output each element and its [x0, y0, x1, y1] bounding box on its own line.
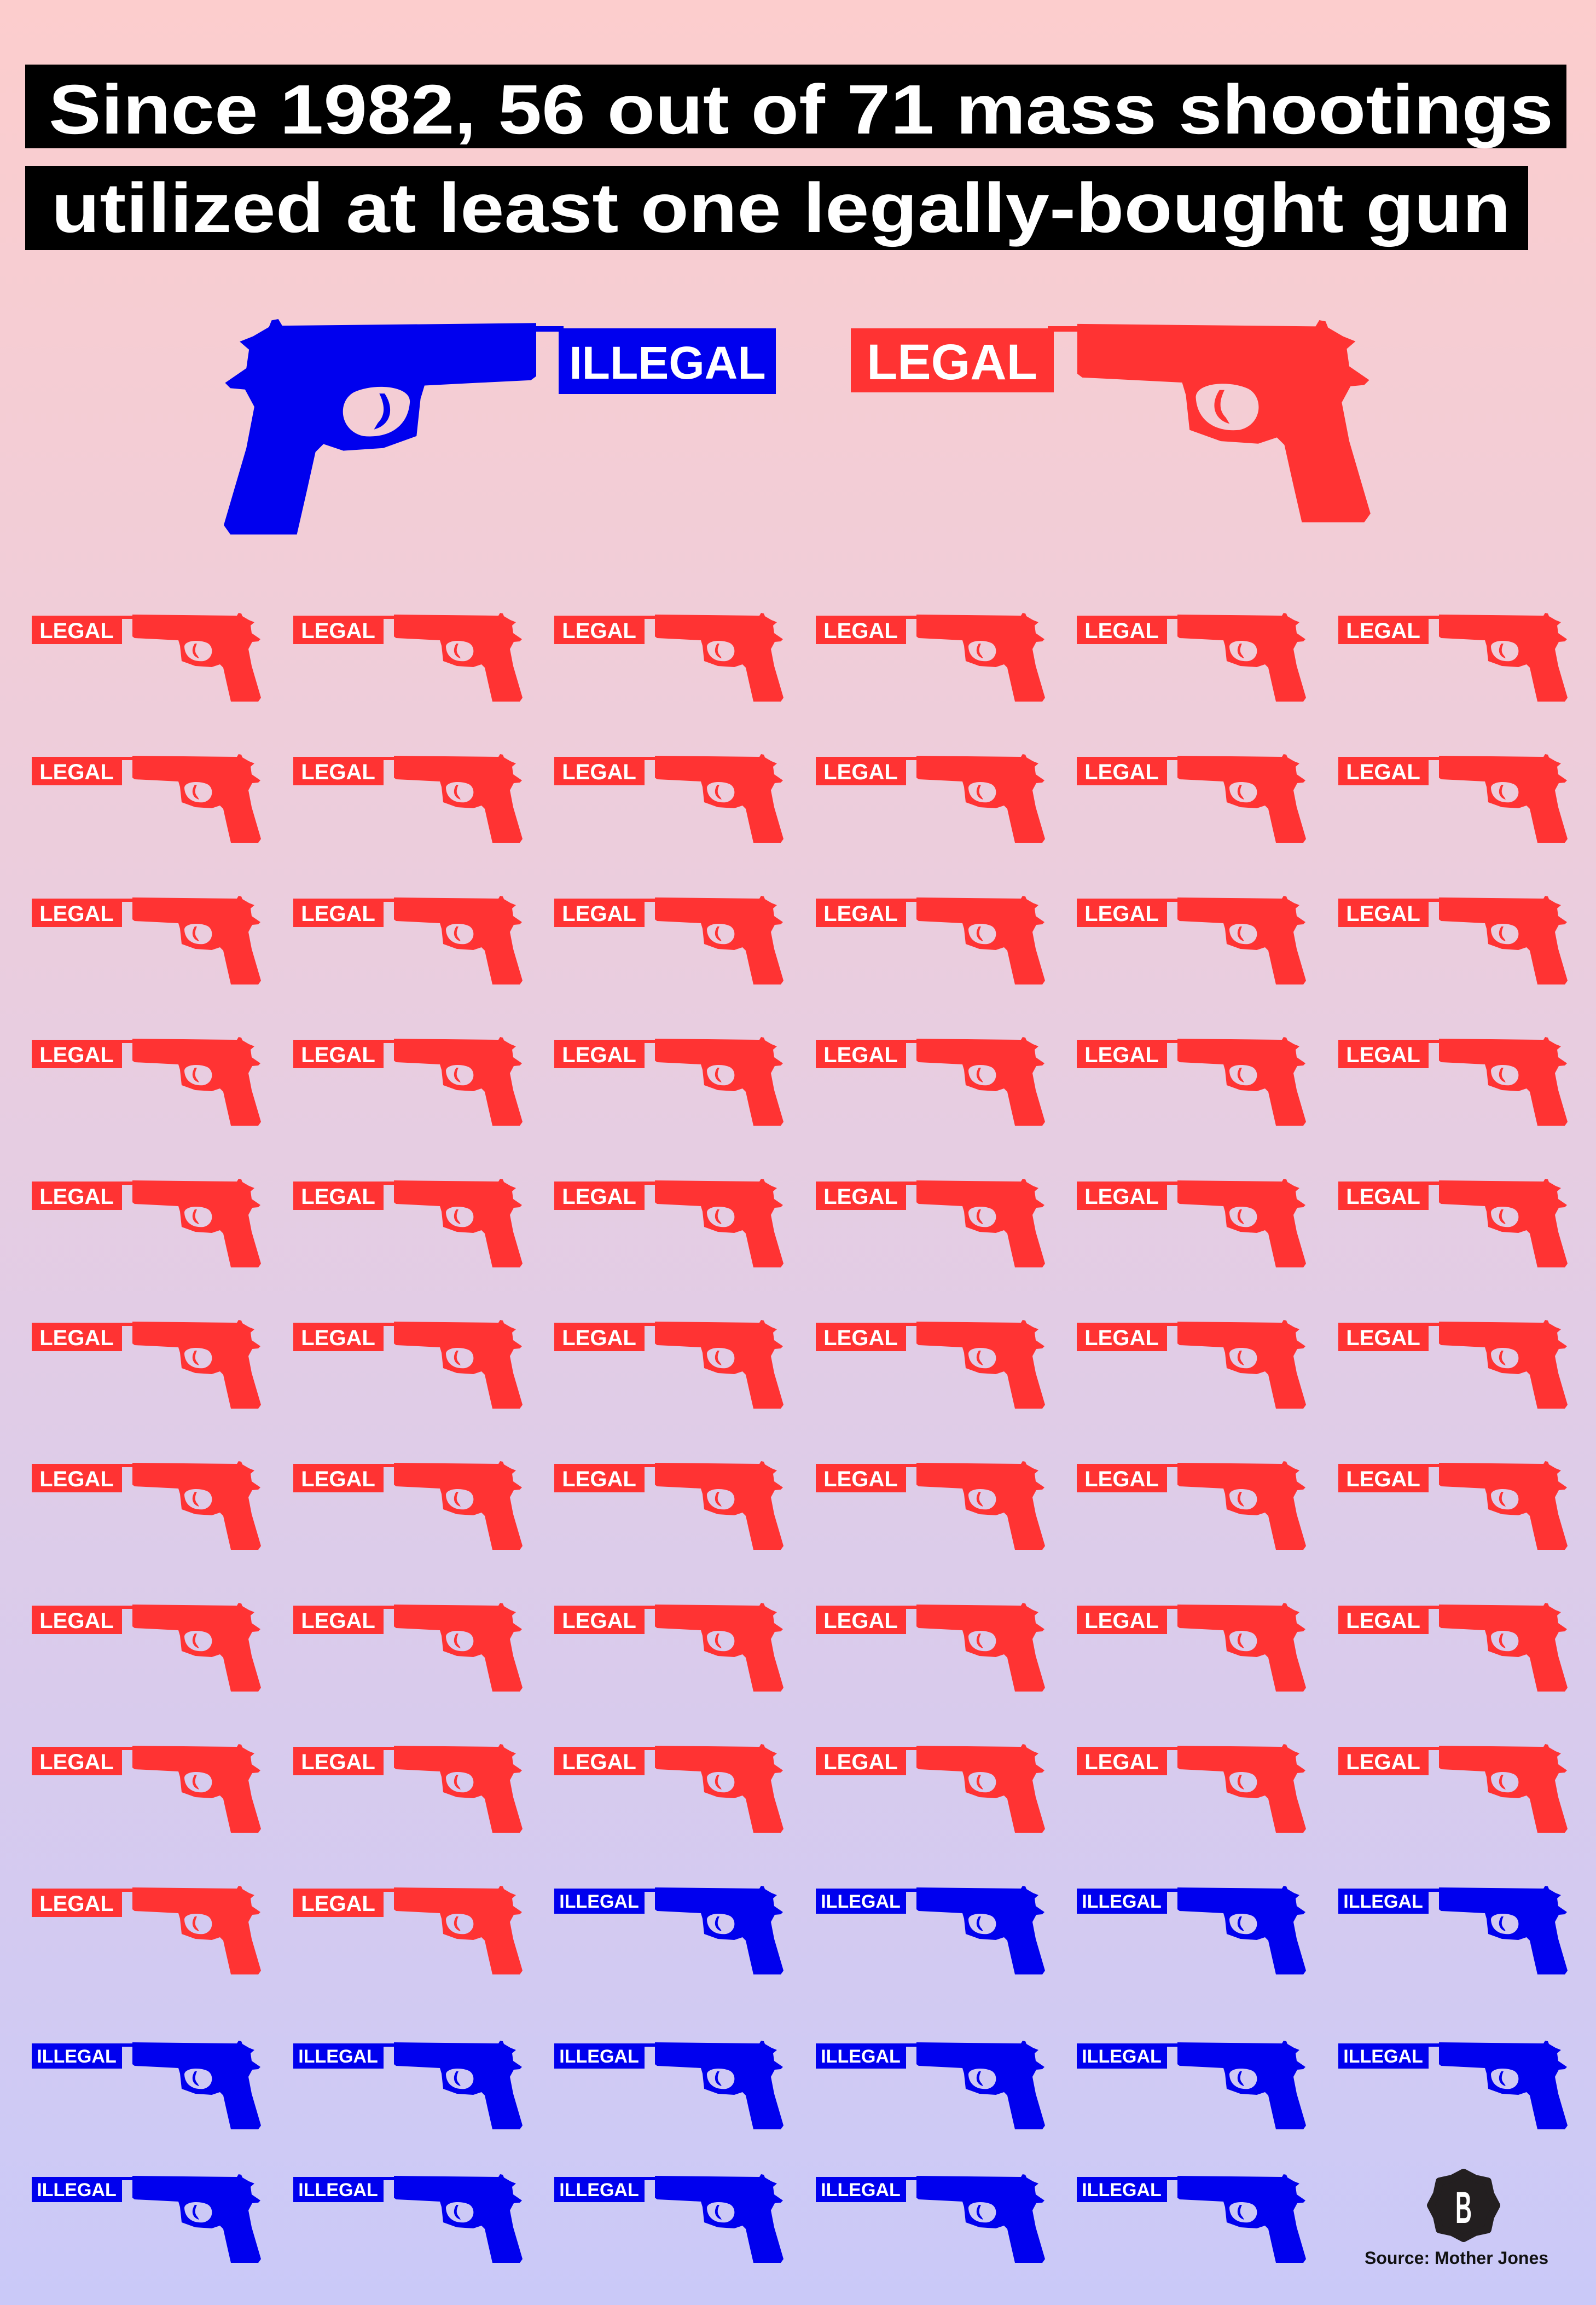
legend: illegal big gun — [224, 319, 776, 535]
row 3 legal: LEGAL — [823, 902, 898, 926]
row 11 illegal: ILLEGAL — [37, 2046, 117, 2067]
logo badge: B — [1455, 2183, 1472, 2233]
row 11 illegal: ILLEGAL — [298, 2046, 378, 2067]
legend: legal big gun — [851, 320, 1371, 522]
row 2 legal: LEGAL — [823, 760, 898, 784]
row 7 legal: LEGAL — [823, 1467, 898, 1491]
row 7 legal: LEGAL — [562, 1467, 636, 1491]
row 11 illegal: ILLEGAL — [559, 2046, 639, 2067]
row 10 mixed: ILLEGAL — [821, 1891, 901, 1912]
row 10 mixed: LEGAL — [39, 1892, 114, 1916]
row 9 legal: LEGAL — [39, 1750, 114, 1774]
row 6 legal: LEGAL — [1346, 1326, 1420, 1350]
row 1 legal — [32, 613, 1568, 702]
title — [25, 65, 1566, 250]
row 9 legal: LEGAL — [1346, 1750, 1420, 1774]
row 5 legal: LEGAL — [1346, 1185, 1420, 1209]
row 4 legal: LEGAL — [1346, 1043, 1420, 1067]
row 6 legal: LEGAL — [1084, 1326, 1159, 1350]
row 12 illegal: ILLEGAL — [1082, 2180, 1162, 2200]
row 2 legal: LEGAL — [301, 760, 375, 784]
row 1 legal: LEGAL — [1084, 619, 1159, 643]
row 5 legal: LEGAL — [301, 1185, 375, 1209]
row 11 illegal: ILLEGAL — [1082, 2046, 1162, 2067]
row 3 legal: LEGAL — [1346, 902, 1420, 926]
row 6 legal: LEGAL — [301, 1326, 375, 1350]
row 4 legal: LEGAL — [301, 1043, 375, 1067]
row 7 legal: LEGAL — [1084, 1467, 1159, 1491]
row 11 illegal — [32, 2041, 1568, 2129]
row 6 legal: LEGAL — [562, 1326, 636, 1350]
legend: legal big gun: LEGAL — [867, 334, 1037, 390]
row 1 legal: LEGAL — [562, 619, 636, 643]
row 12 illegal: ILLEGAL — [298, 2180, 378, 2200]
row 5 legal: LEGAL — [39, 1185, 114, 1209]
source: Source: Mother Jones — [1365, 2248, 1548, 2268]
row 2 legal: LEGAL — [1346, 760, 1420, 784]
gun grid: 56 legal, 15 illegal — [32, 613, 1568, 2263]
row 10 mixed: ILLEGAL — [1082, 1891, 1162, 1912]
row 10 mixed: ILLEGAL — [559, 1891, 639, 1912]
row 6 legal: LEGAL — [39, 1326, 114, 1350]
row 8 legal: LEGAL — [39, 1609, 114, 1633]
row 9 legal: LEGAL — [823, 1750, 898, 1774]
title: Since 1982, 56 out of 71 mass shootings — [49, 71, 1553, 149]
row 7 legal: LEGAL — [39, 1467, 114, 1491]
row 7 legal: LEGAL — [301, 1467, 375, 1491]
row 7 legal: LEGAL — [1346, 1467, 1420, 1491]
row 9 legal: LEGAL — [1084, 1750, 1159, 1774]
row 2 legal — [32, 754, 1568, 843]
row 7 legal — [32, 1461, 1568, 1550]
row 9 legal: LEGAL — [562, 1750, 636, 1774]
row 4 legal: LEGAL — [823, 1043, 898, 1067]
row 8 legal — [32, 1603, 1568, 1692]
logo badge — [1431, 2173, 1496, 2238]
row 4 legal: LEGAL — [562, 1043, 636, 1067]
row 12 illegal: ILLEGAL — [559, 2180, 639, 2200]
row 12 illegal: ILLEGAL — [37, 2180, 117, 2200]
row 8 legal: LEGAL — [301, 1609, 375, 1633]
row 2 legal: LEGAL — [39, 760, 114, 784]
row 3 legal: LEGAL — [39, 902, 114, 926]
row 9 legal — [32, 1744, 1568, 1833]
row 10 mixed: LEGAL — [301, 1892, 375, 1916]
row 4 legal: LEGAL — [39, 1043, 114, 1067]
row 1 legal: LEGAL — [823, 619, 898, 643]
row 11 illegal: ILLEGAL — [1343, 2046, 1423, 2067]
row 2 legal: LEGAL — [562, 760, 636, 784]
row 6 legal — [32, 1320, 1568, 1409]
row 4 legal: LEGAL — [1084, 1043, 1159, 1067]
row 10 mixed: ILLEGAL — [1343, 1891, 1423, 1912]
row 6 legal: LEGAL — [823, 1326, 898, 1350]
row 3 legal — [32, 896, 1568, 984]
legend: illegal big gun: ILLEGAL — [569, 337, 766, 389]
row 3 legal: LEGAL — [1084, 902, 1159, 926]
row 4 legal — [32, 1037, 1568, 1126]
row 9 legal: LEGAL — [301, 1750, 375, 1774]
row 8 legal: LEGAL — [1084, 1609, 1159, 1633]
row 5 legal: LEGAL — [1084, 1185, 1159, 1209]
row 5 legal: LEGAL — [562, 1185, 636, 1209]
title: utilized at least one legally-bought gun — [51, 169, 1511, 247]
row 1 legal: LEGAL — [39, 619, 114, 643]
row 1 legal: LEGAL — [1346, 619, 1420, 643]
row 5 legal: LEGAL — [823, 1185, 898, 1209]
row 8 legal: LEGAL — [823, 1609, 898, 1633]
row 5 legal — [32, 1179, 1568, 1267]
row 3 legal: LEGAL — [301, 902, 375, 926]
row 8 legal: LEGAL — [1346, 1609, 1420, 1633]
row 1 legal: LEGAL — [301, 619, 375, 643]
row 8 legal: LEGAL — [562, 1609, 636, 1633]
row 12 illegal: ILLEGAL — [821, 2180, 901, 2200]
row 10 mixed — [32, 1886, 1568, 1974]
row 12 illegal — [32, 2174, 1306, 2263]
row 3 legal: LEGAL — [562, 902, 636, 926]
row 2 legal: LEGAL — [1084, 760, 1159, 784]
row 11 illegal: ILLEGAL — [821, 2046, 901, 2067]
